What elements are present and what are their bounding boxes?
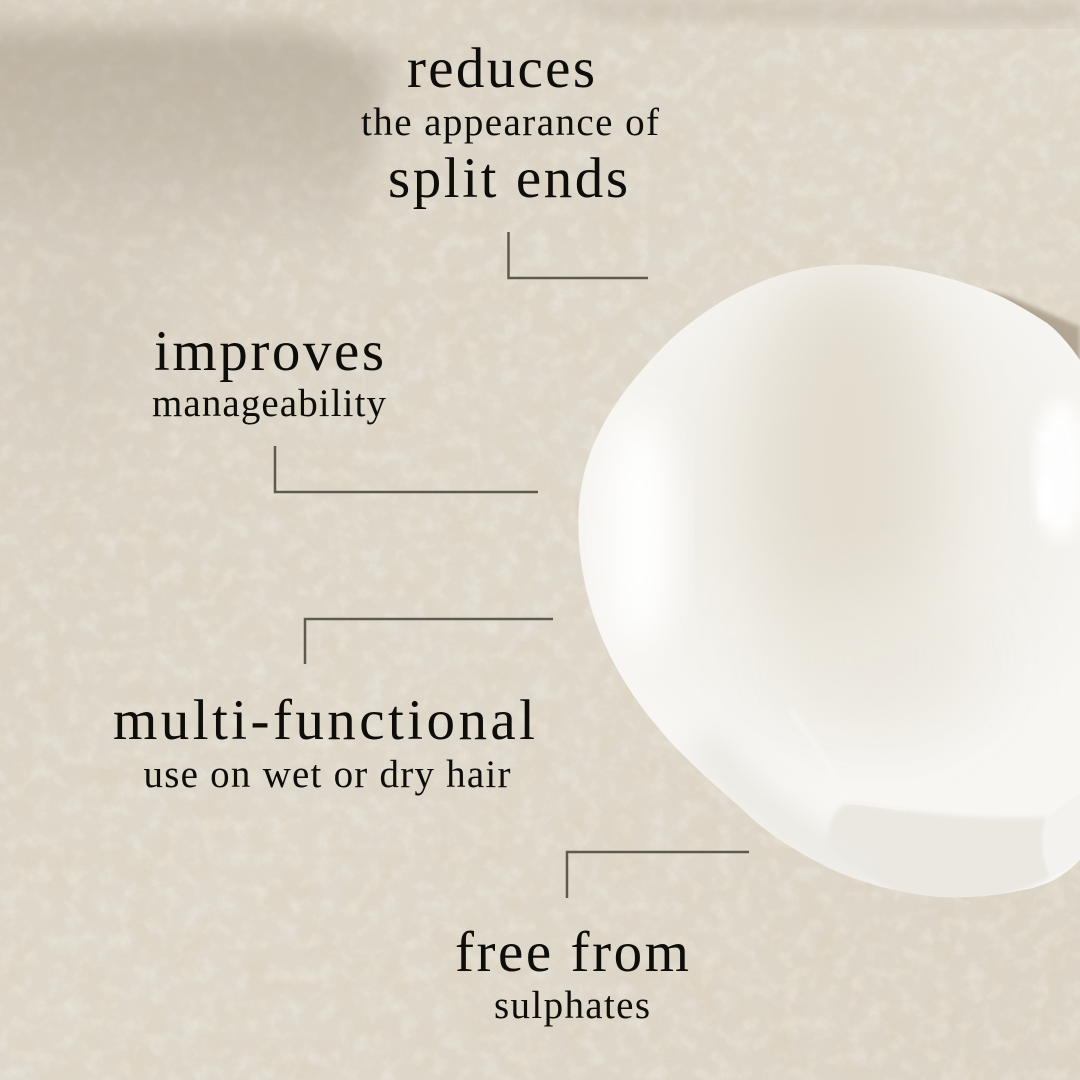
- callout: reduces the appearance of split ends: reduces: [407, 37, 595, 100]
- callout: reduces the appearance of split ends: [361, 37, 659, 278]
- callout: multi-functional use on wet or dry hair: multi-functional: [113, 689, 535, 752]
- shadow band top-left: [0, 28, 390, 270]
- callout: reduces the appearance of split ends: the appearance of: [361, 101, 659, 144]
- callout: reduces the appearance of split ends: split ends: [388, 147, 628, 210]
- callout: free from sulphates: free from: [455, 921, 689, 984]
- callout: free from sulphates: [455, 852, 749, 1027]
- callout: multi-functional use on wet or dry hair: use on wet or dry hair: [144, 753, 510, 796]
- lower skirt of cream: [828, 803, 1050, 900]
- callout: improves manageability: manageability: [152, 382, 386, 425]
- callout: improves manageability: improves: [154, 320, 384, 383]
- callout: improves manageability: [152, 320, 538, 492]
- callout: free from sulphates: sulphates: [494, 984, 650, 1027]
- callout: multi-functional use on wet or dry hair: [113, 619, 553, 796]
- cream swatch: [578, 260, 1080, 900]
- cast shadow by cream: [985, 290, 1080, 380]
